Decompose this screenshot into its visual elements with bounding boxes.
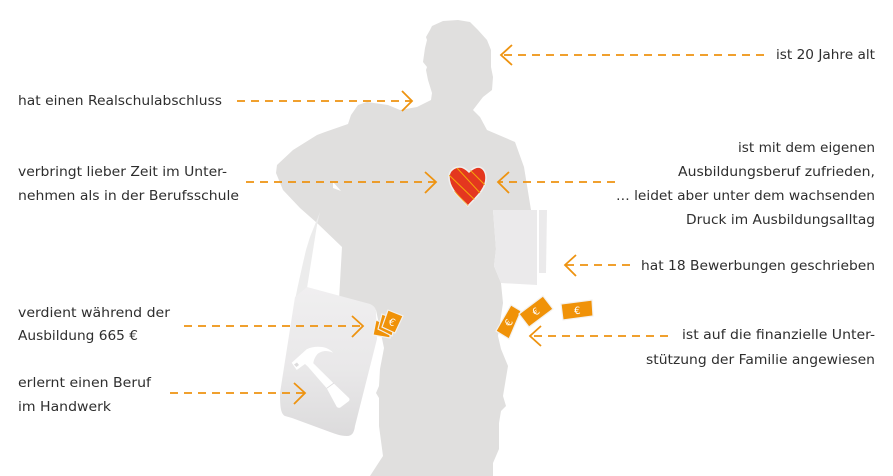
icon: hammer [292, 347, 350, 408]
bag body [280, 287, 377, 436]
text: pay [18, 306, 171, 344]
arrow: company vs school [246, 172, 436, 193]
text: family support [646, 328, 875, 368]
text: trade [18, 376, 151, 415]
text: trade: erlernt einen Beruf [18, 376, 151, 391]
icon: euro note right: € [574, 306, 581, 317]
icon: euro note tilted left [496, 305, 521, 339]
silhouette: person [276, 20, 531, 476]
text: satisfaction and pressure: Druck im Ausbildungsalltag [686, 213, 875, 228]
text: company vs school: nehmen als in der Berufsschule [18, 189, 239, 204]
text: family support: ist auf die finanzielle Unter- [682, 328, 875, 343]
arrow: school degree [237, 91, 412, 111]
text: pay: Ausbildung 665 € [18, 329, 138, 344]
text: family support: stützung der Familie angewiesen [646, 353, 875, 368]
notch between arm and body [333, 182, 341, 191]
text: satisfaction and pressure: ist mit dem eigenen [738, 141, 875, 156]
arrow: pay [184, 316, 363, 337]
text: applications: hat 18 Bewerbungen geschrieben [641, 259, 875, 274]
icon: euro note right [561, 300, 593, 320]
text: satisfaction and pressure [616, 141, 875, 228]
text: company vs school: verbringt lieber Zeit im Unter- [18, 165, 227, 180]
paper: job applications [493, 210, 547, 285]
icon: euro note tilted middle: € [531, 306, 542, 319]
text: trade: im Handwerk [18, 400, 111, 415]
text: age: ist 20 Jahre alt [776, 48, 875, 63]
arrow: trade [170, 383, 305, 404]
arrow: applications [565, 255, 630, 276]
text: pay: verdient während der [18, 306, 171, 321]
hammer grip line [327, 383, 334, 388]
text: school degree: hat einen Realschulabschluss [18, 94, 222, 109]
text: company vs school [18, 165, 239, 204]
arrow: age [501, 45, 764, 65]
shoulder bag [280, 212, 377, 436]
icon: euro note stack: € [387, 317, 397, 329]
icon: euro note tilted left: € [503, 318, 516, 329]
bag strap [295, 212, 320, 300]
hammer head hole [294, 362, 299, 367]
icon: euro note stack [373, 310, 403, 338]
text: satisfaction and pressure: … leidet aber unter dem wachsenden [616, 189, 875, 204]
arrow: family support [530, 326, 668, 346]
arrow: satisfaction [498, 172, 615, 193]
text: satisfaction and pressure: Ausbildungsberuf zufrieden, [678, 165, 875, 180]
icon: euro note tilted middle [519, 296, 553, 327]
icon: striped heart [449, 167, 486, 207]
